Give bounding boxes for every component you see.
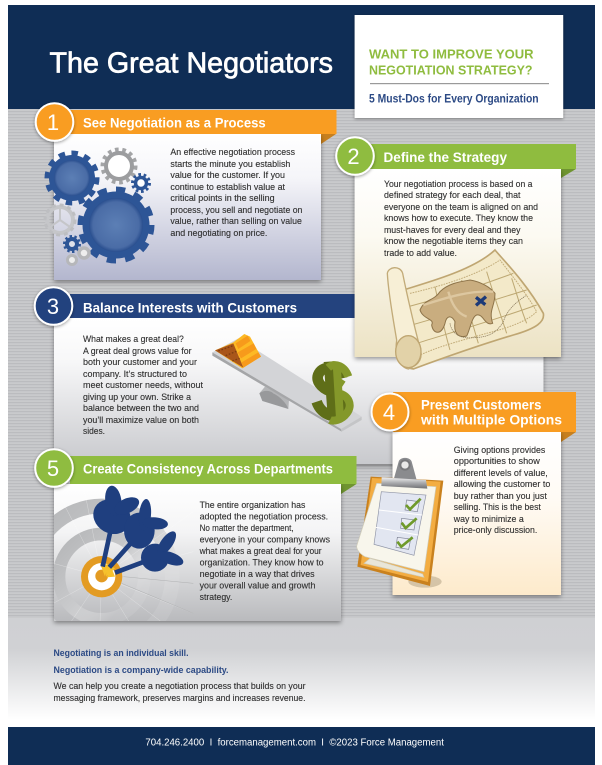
text block 3: meet customer needs, without (83, 379, 203, 390)
text block 1: and negotiating on price. (170, 227, 267, 238)
fold 1 (321, 134, 336, 144)
panel 2: define the strategy (336, 137, 576, 369)
callout: subtitle box: 5 Must-Dos for Every Organization (369, 93, 539, 105)
text block 5: strategy. (200, 591, 232, 602)
text block 2: Your negotiation process is based on a (384, 178, 533, 189)
text block 3: A great deal grows value for (83, 345, 192, 356)
heading band 5 (70, 456, 356, 484)
closing statement: Negotiation is a company-wide capability. (54, 665, 228, 676)
fold 2 (561, 169, 576, 178)
text block 1 (170, 146, 302, 238)
heading band 4 (393, 392, 576, 432)
number badge 1 (36, 103, 73, 141)
heading band 3 (70, 294, 360, 318)
number badge 3: 3 (47, 294, 59, 319)
heading band 4: with Multiple Options (420, 412, 562, 428)
icon: treasure map (387, 250, 544, 369)
text block 3: What makes a great deal? (83, 333, 184, 344)
number badge 1: 1 (47, 110, 59, 135)
text block 4: selling. This is the best (454, 501, 541, 512)
text block 3: you’ll maximize value on both (83, 414, 199, 425)
callout: subtitle box: NEGOTIATION STRATEGY? (369, 62, 533, 77)
heading band 1 (70, 110, 336, 134)
text block 3 (83, 333, 203, 436)
closing statement: We can help you create a negotiation process that builds on your (54, 680, 306, 691)
text block 2: must-haves for every deal and they (384, 224, 521, 235)
text block 4: price-only discussion. (454, 524, 537, 535)
text block 5 (199, 499, 330, 602)
number badge 4: 4 (383, 400, 395, 425)
text block 2: knows how to execute. They know the (384, 212, 533, 223)
panel 4: present customers with multiple options (372, 392, 576, 595)
text block 4: Giving options provides (454, 444, 546, 455)
panel 5: create consistency (32, 448, 356, 626)
text block 3: both your customer and your (83, 356, 197, 367)
heading band 2: Define the Strategy (384, 149, 507, 165)
text block 1: continue to establish value at (170, 181, 285, 192)
icon: clipboard with checklist (357, 458, 443, 588)
text block 5: everyone in your company knows (200, 534, 330, 544)
text block 1: process, you sell and negotiate on (170, 204, 302, 215)
text block 5: negotiate in a way that drives (200, 568, 315, 579)
fading bottom background (8, 618, 595, 720)
text block 1: An effective negotiation process (170, 146, 295, 157)
text block 2: know the negotiable items they can (384, 235, 523, 246)
text block 3: company. It’s structured to (83, 368, 187, 379)
text block 2: trade to add value. (384, 247, 457, 258)
callout: subtitle box (355, 15, 563, 118)
heading band 1: See Negotiation as a Process (83, 115, 266, 131)
text block 4: different levels of value, (454, 467, 548, 478)
text block 5: adopted the negotiation process. (200, 510, 328, 522)
striped background (8, 105, 595, 618)
number badge 5: 5 (47, 456, 59, 481)
text block 5: No matter the department, (200, 522, 294, 533)
text block 1: critical points in the selling (170, 192, 275, 203)
icon: target with darts (54, 486, 194, 621)
text block 5: organization. They know how to (200, 556, 324, 568)
text block 4: allowing the customer to (454, 478, 550, 489)
text block 4: buy rather than you just (454, 490, 547, 501)
panel 3: balance interests (35, 287, 543, 464)
text block 4: way to minimize a (453, 513, 525, 524)
text block 2: everyone on the team is aligned on and (384, 201, 538, 212)
number badge 4 (372, 394, 408, 430)
icon: gears (45, 150, 152, 264)
text block 5: what makes a great deal for your (199, 545, 322, 556)
number badge 2: 2 (347, 144, 360, 169)
heading band 2 (370, 144, 576, 169)
heading band 5: Create Consistency Across Departments (83, 461, 333, 477)
text block 1: starts the minute you establish (170, 158, 290, 169)
text block 4 (453, 444, 550, 535)
footer: 704.246.2400 I forcemanagement.com I ©2023 Force Management (145, 738, 444, 748)
text block 2 (384, 178, 538, 258)
text block 3: balance between the two and (83, 402, 199, 413)
text block 5: The entire organization has (200, 499, 306, 510)
footer (8, 727, 595, 765)
number badge 5 (35, 449, 73, 487)
panel 1: see negotiation as a process (36, 103, 336, 280)
closing statement: Negotiating is an individual skill. (54, 648, 188, 659)
icon: seesaw with gold and dollar (212, 334, 362, 432)
fold 4 (561, 432, 576, 442)
text block 1: value, rather than selling on value (170, 215, 302, 226)
text block 3: sides. (83, 425, 105, 436)
number badge 3 (35, 287, 72, 325)
number badge 2 (336, 137, 374, 175)
closing statement (54, 648, 306, 703)
text block 4: opportunities to show (454, 455, 540, 466)
closing statement: messaging framework, preserves margins and increases revenue. (54, 692, 306, 703)
callout: subtitle box: WANT TO IMPROVE YOUR (369, 46, 534, 61)
heading band 4: Present Customers (421, 397, 542, 413)
header banner (8, 5, 595, 109)
text block 1: value for the customer. If you (170, 169, 285, 180)
fold 5 (341, 484, 356, 494)
heading band 3: Balance Interests with Customers (83, 299, 297, 315)
text block 5: your overall value and growth (200, 580, 315, 590)
text block 2: defined strategy for each deal, that (384, 189, 521, 200)
text block 3: giving up your own. Strike a (83, 391, 192, 402)
title: The Great Negotiators (50, 48, 333, 80)
